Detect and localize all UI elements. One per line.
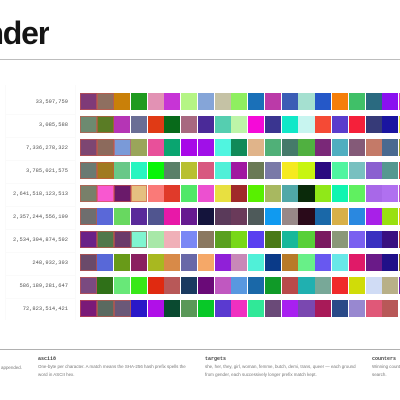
count: row 7: 2,534,394,874,592 — [13, 237, 68, 243]
footer note: targets: from gender, each successively longer prefix match kept. — [205, 372, 317, 377]
footer note: ascii8: word in ASCII hex. — [38, 372, 75, 377]
footer note: ascii8: ascii8 — [38, 356, 56, 362]
header rule — [0, 58, 400, 60]
footer rule — [0, 348, 400, 350]
count: row 6: 2,357,244,556,199 — [13, 214, 68, 220]
swatch row 3 — [80, 139, 400, 156]
swatch row 4 — [80, 162, 400, 179]
count: row 2: 3,085,588 — [39, 122, 68, 128]
count: row 3: 7,336,278,322 — [26, 145, 68, 151]
footer note: counters — [372, 356, 400, 377]
swatch row 5 — [80, 185, 400, 202]
count: row 1: 33,597,759 — [36, 99, 68, 105]
swatch row 9 — [80, 277, 400, 294]
count: row 9: 586,189,281,647 — [19, 283, 68, 289]
footer note: targets: targets — [205, 356, 226, 362]
footer note: targets: she, her, they, girl, woman, femme, butch, demi, trans, queer — each ground — [205, 364, 356, 369]
swatch row 2 — [80, 116, 400, 133]
swatch row 7 — [80, 231, 400, 248]
count: row 8: 248,932,393 — [32, 260, 68, 266]
swatch row 8 — [80, 254, 400, 271]
footer note: targets — [205, 356, 356, 377]
swatch row 1 — [80, 93, 400, 110]
footer note: counters: search. — [372, 372, 387, 377]
footer note: clipped first column: ‭appended.‬ — [1, 364, 22, 370]
swatch row 10 — [80, 300, 398, 317]
footer note: ascii8 — [38, 356, 186, 377]
footer note: ascii8: One-byte per character. A match means the SHA-256 hash prefix spells the — [38, 364, 186, 369]
swatch row 6 — [80, 208, 400, 225]
count: row 5: 2,641,518,123,513 — [13, 191, 68, 197]
count: row 10: 72,823,514,421 — [23, 306, 68, 312]
footer note: counters: counters — [372, 356, 396, 362]
count: row 4: 3,785,021,575 — [26, 168, 68, 174]
